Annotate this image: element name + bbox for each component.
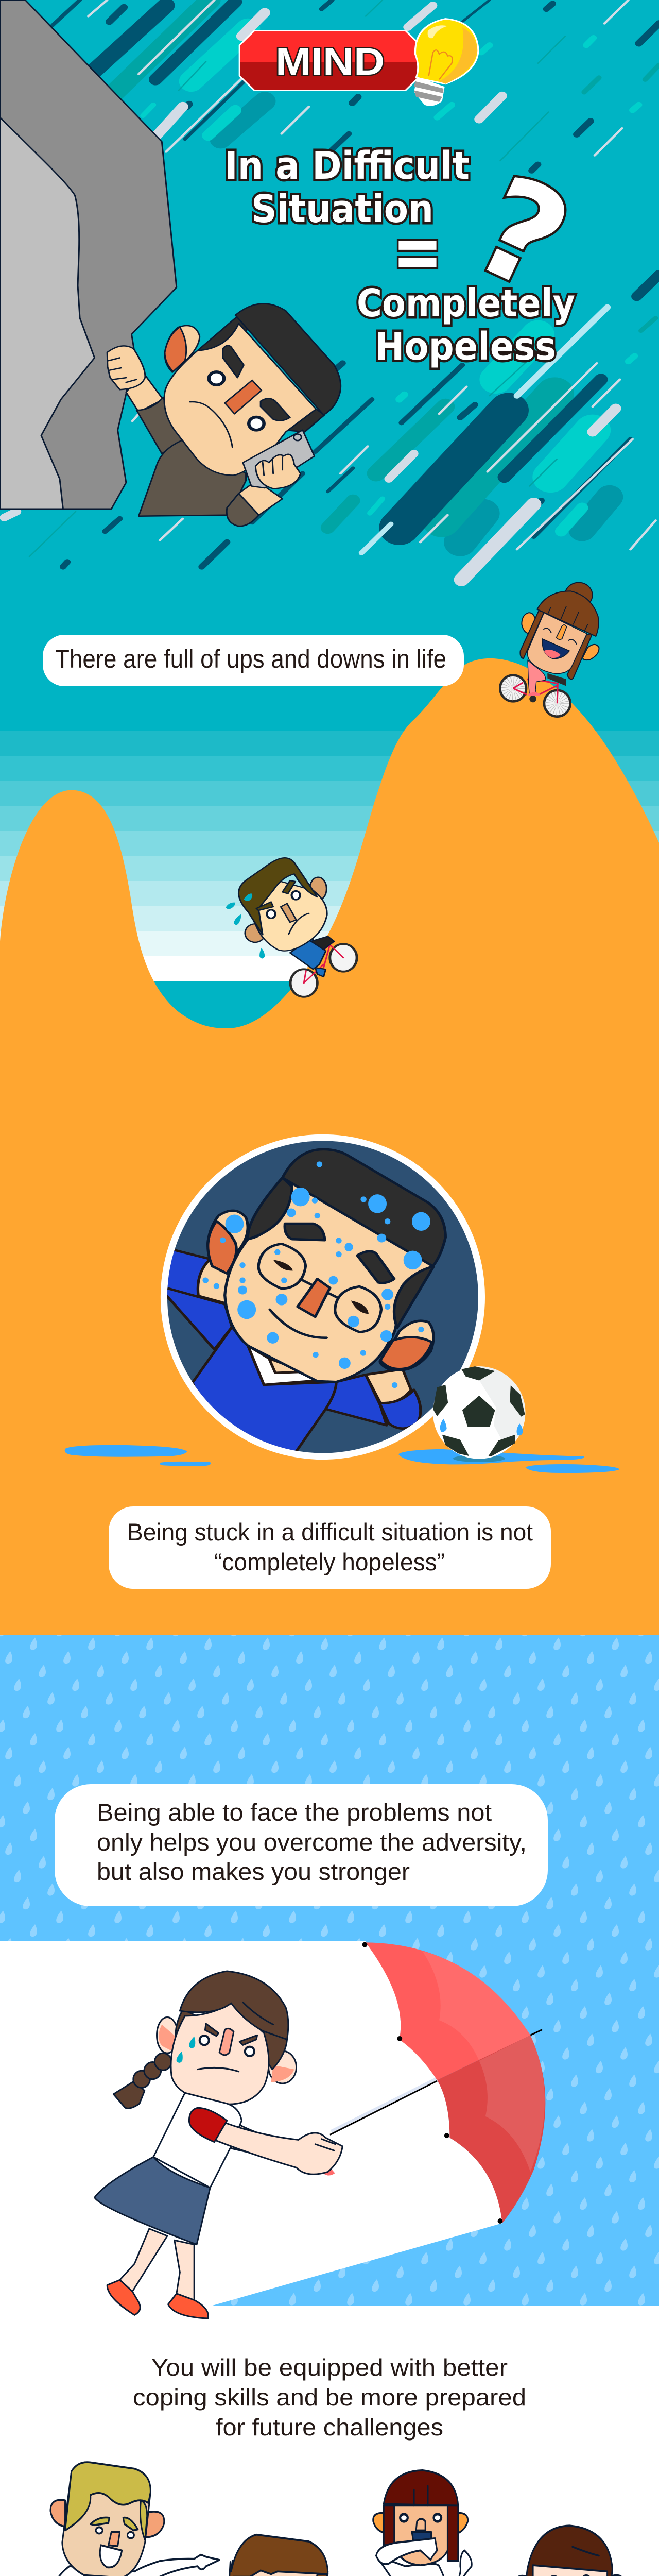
speech pill: not completely hopeless: “completely hopeless” [214,1548,445,1575]
equals sign: = [392,207,443,297]
portrait: crying boy in circle [160,1134,485,1460]
body [193,1327,387,1458]
nose [281,904,297,922]
braid [113,2053,171,2108]
canopy lower [437,2035,546,2223]
title line 4: Hopeless [375,325,556,369]
diagonal rain streaks [4,0,659,580]
mouth [100,2545,122,2567]
tear drops [202,1161,430,1388]
hair [238,858,317,935]
side hair [176,2010,287,2070]
mouth [198,2067,239,2072]
background: teal sky [0,0,659,1133]
side hair [520,611,593,679]
nose [109,2532,120,2546]
text: coping skills [133,2354,526,2441]
rainy blue background [0,1635,659,2306]
hair [65,2462,150,2530]
forearm [126,372,163,412]
text: coping skills: You will be equipped with better [151,2354,508,2381]
collar [248,1346,317,1385]
sky gradient bands [0,731,659,981]
face [171,2003,269,2104]
mouth [412,2532,431,2545]
canopy tips [362,1942,502,2224]
icon: soccer ball [433,1366,525,1462]
cliff light face [0,117,95,509]
speech pill: face the problems [55,1784,548,1906]
question mark: ? [452,146,591,323]
shaft [331,2079,436,2131]
hair [228,2535,328,2576]
character: blond man pointing [47,2462,219,2576]
title line 3: Completely [357,281,575,326]
icon: light bulb [414,19,478,106]
tears [177,2037,195,2063]
face [528,613,587,673]
brows and eyes [91,2517,138,2530]
character: sad boy on bicycle [238,858,357,997]
hair [521,2526,612,2576]
speech pill: face the problems: only helps you overcome the adversity, [97,1828,527,1856]
speech pill: ups and downs: There are full of ups and downs in life [55,645,446,673]
speech pill: face the problems: Being able to face the problems not [97,1799,492,1826]
smiling eyes [543,628,577,645]
character: brown-haired man thinking [214,2535,338,2576]
text: coping skills: coping skills and be more prepared [133,2384,526,2411]
cliff dark face [0,0,177,509]
back arm [231,2125,303,2167]
ears [522,613,535,634]
character: worried man with phone [107,303,341,526]
shoes [107,2280,140,2315]
front arm and hands [321,2170,335,2176]
ears [516,2575,624,2576]
speech pill: ups and downs [43,635,464,686]
white wind shelter wedge [0,1941,502,2306]
smile [270,1310,326,1338]
upper sleeve [167,1249,209,1295]
text: coping skills: for future challenges [216,2414,443,2441]
eyes [292,891,300,900]
ear [165,326,200,372]
eyebrows [223,346,290,421]
hair band [235,303,341,415]
mouth [289,913,309,934]
hair back and sides [198,316,248,351]
brows [256,880,296,910]
character: happy girl on bicycle [500,583,599,717]
badge text: MIND [275,40,385,83]
fist [107,346,145,389]
bicycle frame [513,679,558,703]
face [248,880,327,951]
character: girl holding umbrella [95,1971,342,2318]
glasses [258,1244,381,1332]
sleeve [136,398,185,453]
arm across mouth [376,2538,437,2564]
umbrella [330,1942,545,2224]
title line 1: In a Difficult [224,144,470,188]
badge: MIND [239,31,420,90]
bicycle wheels [500,675,570,717]
arm and sleeve right [366,1369,411,1403]
head [225,2561,328,2576]
ears [157,2017,178,2053]
legs [120,2229,167,2292]
bun [565,583,593,607]
eyebrows [285,1224,325,1240]
nose [557,625,567,639]
skirt [95,2157,210,2245]
title: In a Difficult Situation = Completely Hopeless ? [224,144,591,369]
fringe [384,2470,458,2505]
body [528,660,546,694]
closed eyes [273,1260,369,1314]
shoulder [167,1287,231,1350]
puddles [65,1445,619,1473]
head [62,2471,150,2576]
rock cliff [0,0,177,509]
torso [153,2093,241,2188]
red sleeve [189,2108,227,2142]
speech pill: not completely hopeless: Being stuck in a difficult situation is not [127,1518,533,1546]
body [376,2556,493,2576]
body [290,938,326,969]
ears [373,2513,468,2535]
character: girl with crossed arms [496,2526,624,2576]
nose [225,380,262,414]
eyebrows [205,2024,257,2045]
white ring [161,1134,485,1460]
bike frame [304,944,343,983]
wheels [290,944,357,997]
title line 2: Situation [251,187,433,231]
ears, face, hair [208,1149,445,1382]
character: red-haired girl covering mouth [373,2470,493,2576]
face [394,2505,447,2565]
shoe [528,692,540,696]
badge shape [239,31,420,90]
portrait contents [160,1246,421,1458]
side hair [384,2505,458,2561]
torso [138,439,246,516]
body [47,2555,219,2576]
ears [310,877,326,900]
nose [219,2028,234,2055]
hair top [180,1971,288,2040]
navy backdrop [167,1141,478,1453]
mouth [542,639,569,658]
hand on phone [255,454,301,488]
hand [197,1260,228,1303]
nose [298,1279,330,1317]
hair cap [537,591,599,636]
speech pill: face the problems: but also makes you stronger [97,1858,410,1885]
ears [50,2500,164,2537]
orange hills [0,658,659,1635]
head [164,324,316,476]
face [533,2565,608,2576]
nose [416,2519,425,2530]
eyes [400,2514,408,2521]
mouth [190,402,232,447]
lower arm and sleeve [227,494,259,526]
canopy upper [366,1942,530,2080]
speech pill: not completely hopeless [109,1506,551,1589]
eyes [209,372,224,385]
phone [243,430,315,488]
sweat drops [226,893,265,959]
eyes [200,2036,209,2045]
